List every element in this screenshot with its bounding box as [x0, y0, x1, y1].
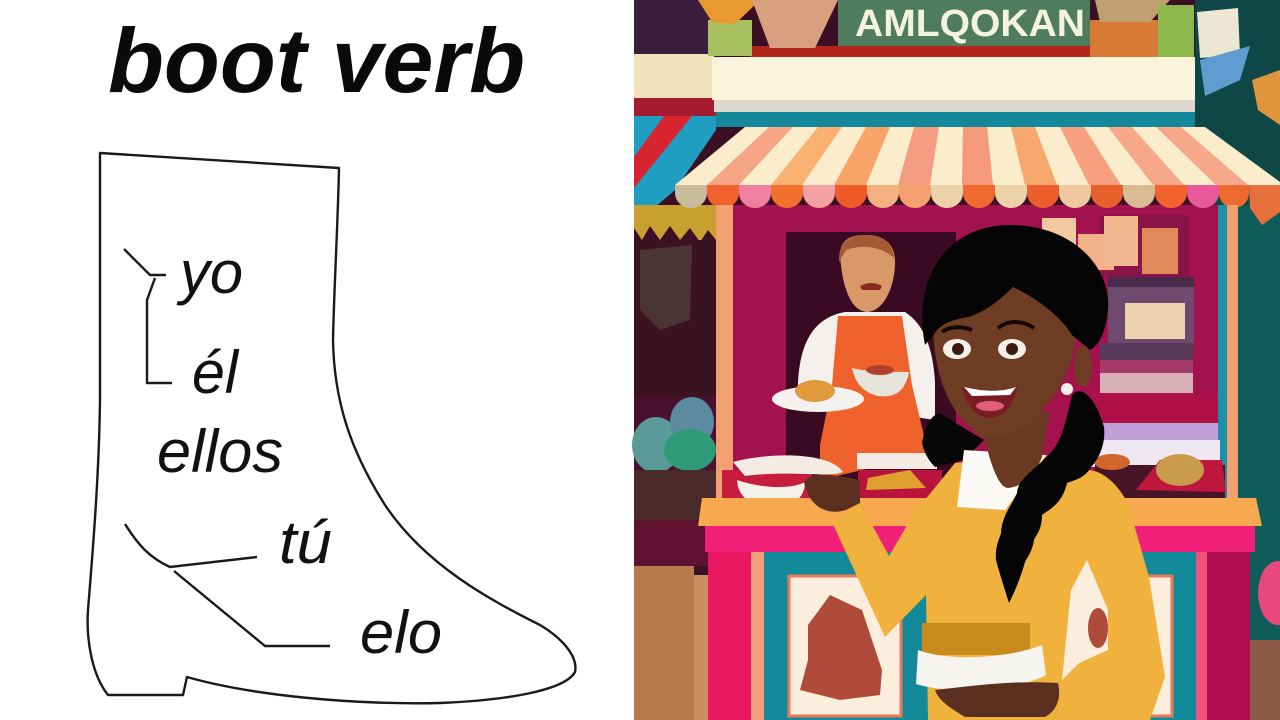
left poster: [789, 576, 901, 716]
label: yo: yo: [176, 239, 243, 306]
awning scallops: [675, 185, 1280, 225]
raised hand: [804, 475, 860, 512]
connector: elo: [174, 571, 330, 646]
label: él: él: [192, 339, 240, 406]
stall back wall: [716, 205, 1236, 505]
counter food trays: [722, 453, 1226, 506]
white collar: [957, 450, 1046, 510]
label: tú: tú: [279, 509, 332, 576]
golden belt: [922, 623, 1030, 655]
title: boot verb: [108, 11, 525, 112]
face: [933, 269, 1076, 439]
counter top: [698, 498, 1262, 526]
panel: market stall illustration: [632, 0, 1280, 720]
hair: [922, 225, 1108, 350]
vendor man: [772, 235, 935, 480]
shop sign: [750, 0, 1090, 57]
label: elo: elo: [360, 599, 442, 666]
dark serving window: [786, 232, 956, 490]
neck: [985, 410, 1050, 488]
shop sign: AMLQOKAN: [855, 3, 1085, 45]
lower hand: [935, 682, 1059, 717]
vendor head: [840, 235, 895, 312]
connector: yo to él: [124, 249, 172, 383]
yellow dress: [832, 455, 1165, 720]
woman: [804, 225, 1165, 720]
balloon: [1258, 561, 1280, 625]
panel: boot verb diagram: [88, 11, 575, 703]
fascia board: [712, 57, 1195, 127]
ear and earring: [1074, 345, 1092, 387]
cloth at waist: [916, 645, 1046, 690]
mouth: [962, 387, 1017, 418]
connector: tú: [125, 524, 257, 567]
counter band: [705, 526, 1255, 552]
boot outline: [88, 153, 575, 703]
eyes: [943, 339, 971, 359]
counter base: [708, 552, 751, 720]
stall posts: [716, 205, 1238, 500]
bowl: [852, 368, 909, 396]
display shelves with pastries: [1042, 215, 1220, 467]
label: ellos: ellos: [157, 418, 283, 485]
braid: [996, 391, 1104, 603]
street background: [632, 0, 1280, 720]
vendor apron: [820, 316, 925, 480]
plate with pastry: [772, 386, 864, 412]
flowers and produce on the roof: [698, 0, 1280, 125]
red poster food in gap: [1088, 608, 1108, 648]
right poster: [1060, 576, 1172, 716]
striped awning: [675, 127, 1280, 185]
back hair: [922, 413, 984, 467]
counter: [698, 498, 1262, 720]
vendor shirt: [798, 312, 935, 420]
gap between arm and body: [1062, 560, 1108, 680]
eyebrows: [942, 322, 1034, 332]
